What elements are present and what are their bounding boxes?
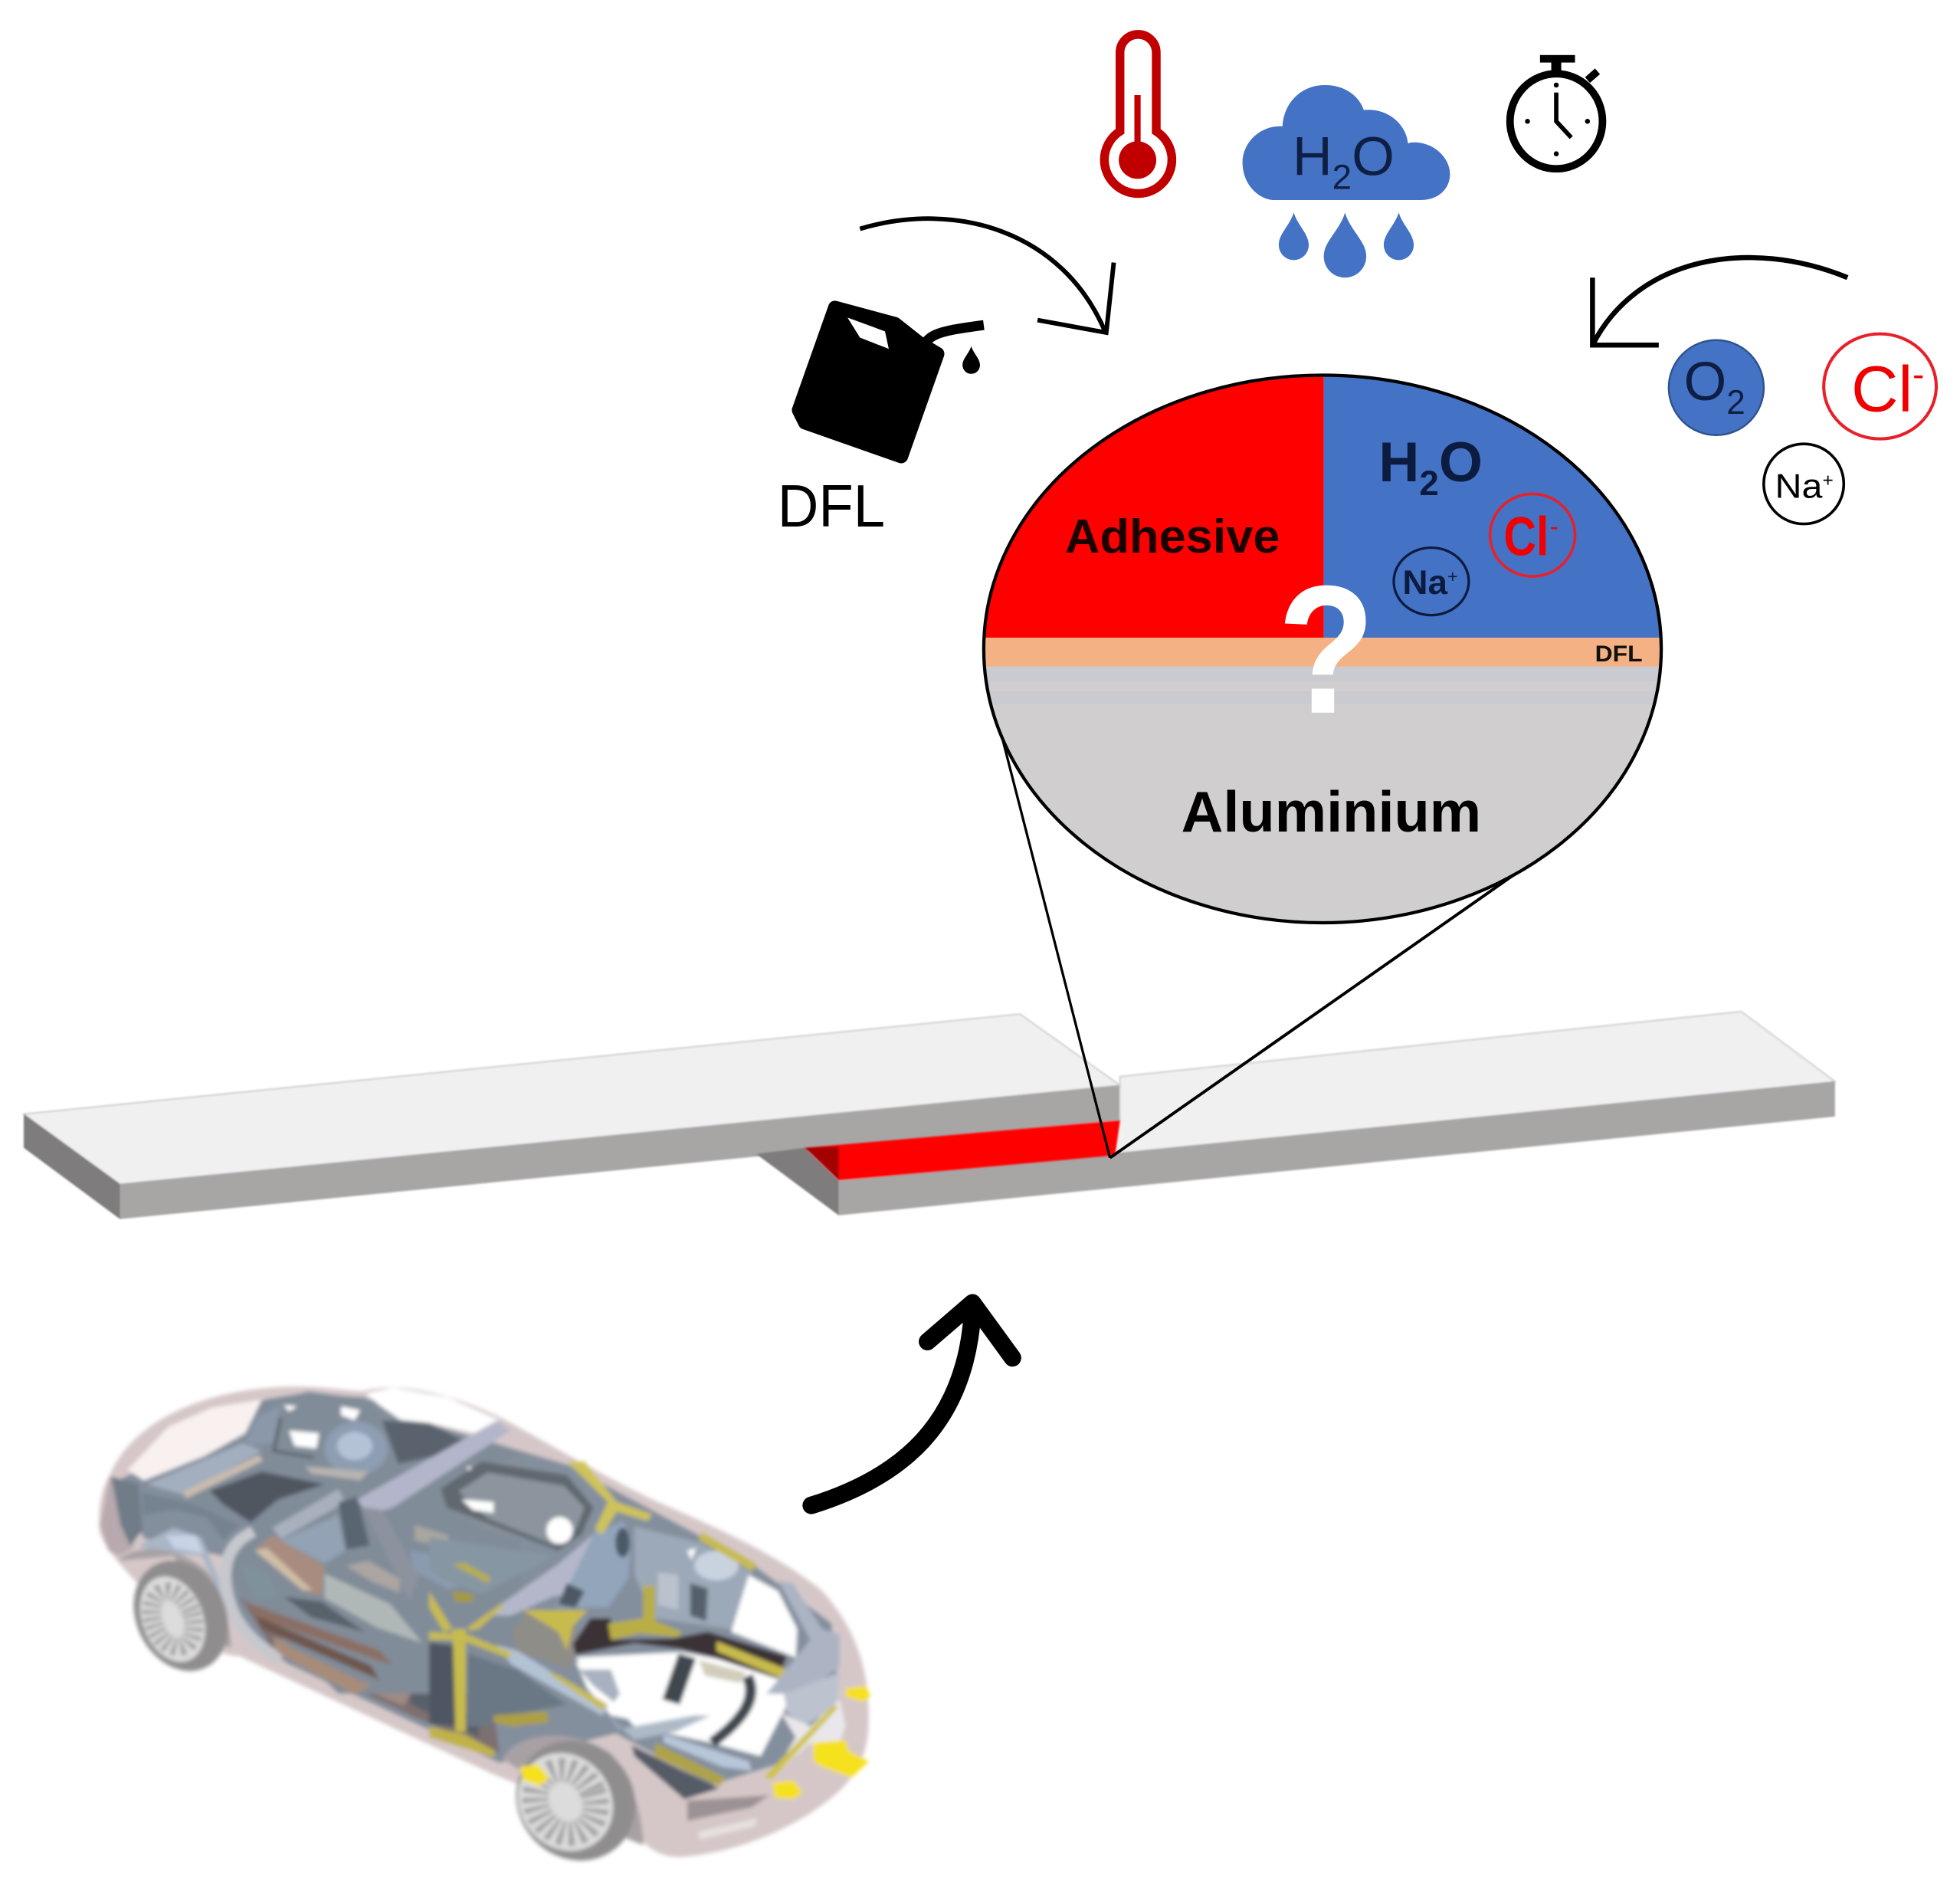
label: DFL: DFL [778, 472, 885, 540]
cloud label: O [1352, 126, 1395, 187]
lens label: Aluminium: Aluminium [1182, 779, 1481, 844]
icon: oil canister [798, 307, 984, 456]
lens ion: Na+: + [1447, 566, 1457, 586]
lens ion: Cl-: Cl [1504, 506, 1549, 567]
ion: Cl-: Cl [1851, 353, 1912, 425]
adhesive layer in joint [805, 1120, 1120, 1180]
ion: O2 [1669, 340, 1764, 435]
lens ion: Na+: Na [1402, 564, 1448, 602]
lens label: DFL: DFL [1595, 641, 1643, 667]
rear half of the car [100, 1388, 521, 1695]
ion: Cl- [1824, 334, 1936, 439]
bay void [575, 1652, 790, 1756]
car body-in-white illustration [99, 1386, 870, 1877]
car shell and interior base [99, 1386, 869, 1857]
icon: stopwatch [1510, 55, 1602, 169]
lens label: Adhesive: Adhesive [1065, 510, 1280, 563]
lens label: H2O: 2 [1419, 464, 1439, 503]
drops [1279, 212, 1414, 277]
lens label: H2O: O [1439, 431, 1483, 494]
aluminium joint: left substrate [24, 1014, 1120, 1219]
lens ion: Cl-: - [1550, 512, 1558, 540]
ion: O2: 2 [1726, 384, 1745, 422]
front half of the car [429, 1462, 870, 1877]
bright yellow crash parts [520, 1686, 870, 1800]
cloud label: H [1293, 126, 1332, 187]
lens label: question mark: ? [1277, 548, 1375, 752]
lens ion: Cl- [1490, 494, 1575, 576]
ion: Na+ [1764, 444, 1844, 524]
cloud label: 2 [1332, 157, 1352, 196]
aluminium joint: right substrate [756, 1012, 1835, 1216]
panel: magnified lens cross-section [975, 369, 1667, 929]
lens label: H2O: H [1378, 431, 1419, 494]
ion: O2: O [1683, 351, 1726, 412]
icon: rain cloud with H2O [1243, 85, 1450, 277]
front wheel [503, 1736, 643, 1846]
lens ion: Na+ [1394, 548, 1469, 615]
ion: Cl-: - [1912, 355, 1924, 394]
arrow: DFL into joint [860, 218, 1114, 333]
rear wheel [118, 1548, 244, 1684]
ion: Na+: Na [1775, 468, 1823, 505]
arrow: ions into joint [1592, 258, 1847, 345]
arrow: car to joint [811, 1303, 1012, 1505]
ion: Na+: + [1823, 471, 1834, 491]
zoom lines from joint to lens [990, 691, 1528, 1158]
icon: thermometer [1104, 34, 1172, 194]
